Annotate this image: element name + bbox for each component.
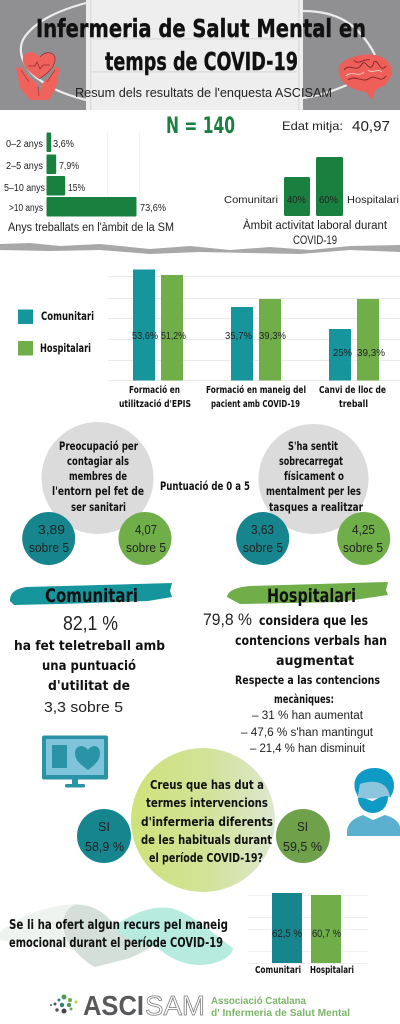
heading: hospitalari: Hospitalari [267,585,356,607]
panel: hospitalari: – 21,4 % han disminuit [250,743,366,755]
panel: contagion worry: 4,07 [135,523,157,537]
bar chart: years worked: 7,9% [59,161,79,172]
logo: ASCISAM: SAM [145,990,205,1021]
panel: overload: tasques a realitzar [269,500,363,514]
bar chart: emotional support [248,893,368,976]
panel: comunitari: ha fet teletreball amb [14,639,165,654]
panel: overload: físicament o [284,469,344,483]
bar chart: training and job change: 39,3% [357,347,385,359]
panel: contagion worry: ser sanitari [71,500,126,514]
title: temps de COVID-19 [105,47,298,76]
bar chart: training and job change: 51,2% [161,330,186,342]
callout: hospitalari yes: 59,5 % [283,839,322,854]
bar chart: years worked: 3,6% [53,139,74,150]
bar chart: training and job change: 39,3% [259,330,286,342]
icon: nurse with mask [347,768,400,836]
legend: Comunitari [41,309,94,323]
face mask [86,0,303,110]
panel: contagion worry: sobre 5 [126,541,166,555]
bar chart: emotional support: Hospitalari [310,965,354,976]
bar chart: work setting: COVID-19 [293,235,337,247]
callout: hospitalari yes: SI [297,819,308,834]
callout: hospitalari yes [276,809,330,863]
bar chart: training and job change: 25% [333,347,352,359]
bar chart: work setting [224,157,399,247]
panel: comunitari: d'utilitat de [48,679,130,694]
icon: logo dots [50,994,78,1014]
bar chart: training and job change: utilització d'EPIS [119,399,191,410]
panel: hospitalari: 79,8 % [203,610,252,629]
callout: comunitari yes [77,809,131,863]
panel: overload: 4,25 [352,523,375,537]
icon: brain [339,54,392,100]
panel: overload: 3,63 [251,523,274,537]
bar chart: emotional support: Comunitari [255,965,301,976]
score scale note: Puntuació de 0 a 5 [160,479,250,493]
bar chart: years worked: 5–10 anys [4,183,45,194]
title [36,14,366,76]
mean age: Edat mitja: [282,119,343,133]
bar chart: work setting: 60% [319,194,338,206]
bar chart: years worked: Anys treballats en l'àmbit de la SM [8,222,174,234]
logo: ASCISAM: Associació Catalana [211,995,306,1007]
header banner [0,0,400,110]
panel: different interventions question: d'infermeria diferents [141,814,273,829]
panel: emotional support question [0,904,233,967]
logo: ASCISAM: d' Infermeria de Salut Mental [211,1007,350,1019]
bar chart: emotional support: 62,5 % [272,928,302,940]
panel: overload: mentalment per les [266,484,361,498]
panel: different interventions question: Creus que has dut a [150,777,264,792]
callout: comunitari yes: SI [98,819,110,834]
panel: different interventions question: termes intervencions [146,795,268,810]
bar chart: work setting: Àmbit activitat laboral durant [243,219,388,232]
panel: contagion worry: membres de [69,469,127,483]
bar chart: training and job change: Formació en maneig del [206,385,306,396]
panel: comunitari: 3,3 sobre 5 [44,699,123,716]
panel: hospitalari: – 31 % han aumentat [252,710,364,722]
panel: comunitari [10,583,172,788]
panel: hospitalari: considera que les [259,614,368,629]
panel: hospitalari: mecàniques: [274,692,334,706]
bar chart: years worked: >10 anys [9,203,43,214]
panel: overload [236,424,390,565]
panel: emotional support question: emocional durant el període COVID-19 [9,936,223,951]
mask ear loops [21,3,375,100]
panel: different interventions question: de les habituals durant [141,832,272,847]
panel: hospitalari [203,582,400,836]
panel: overload: sobre 5 [243,541,283,555]
icon: monitor with heart [42,736,108,788]
mean age: 40,97 [352,118,390,135]
heading: hospitalari [227,582,388,607]
bar chart: training and job change: Formació en [129,385,180,396]
panel: different interventions question [77,748,330,892]
logo: ASCISAM [50,990,350,1021]
bar chart: work setting: 40% [287,194,306,206]
panel: different interventions question: el període COVID-19? [149,850,263,865]
sample size: N = 140 [166,114,235,139]
panel: overload: sobrecarregat [279,454,343,468]
logo: ASCISAM: ASCI [83,990,144,1021]
heading: comunitari: Comunitari [45,585,138,607]
bar chart: years worked: 73,6% [140,203,166,214]
bar chart: training and job change: 35,7% [225,330,252,342]
bar chart: training and job change: pacient amb COVID-19 [211,399,300,410]
bar chart: years worked: 0–2 anys [6,139,43,150]
panel: hospitalari: – 47,6 % s'han mantingut [241,727,374,739]
legend: Hospitalari [40,341,91,355]
bar chart: years worked: 2–5 anys [6,161,43,172]
callout: comunitari yes: 58,9 % [85,839,124,854]
panel: contagion worry: Preocupació per [59,439,138,453]
bar chart: training and job change [108,270,400,410]
panel: comunitari: 82,1 % [63,613,118,635]
bar chart: training and job change: treball [339,399,368,410]
panel: contagion worry: contagiar als [67,454,129,468]
heading: comunitari [10,583,172,607]
panel: contagion worry: 3,89 [38,523,65,537]
panel: overload: sobre 5 [343,541,383,555]
bar chart: work setting: Hospitalari [347,194,399,206]
bar chart: training and job change: 53,6% [132,330,158,342]
panel: contagion worry: l'entorn pel fet de [52,484,144,498]
legend [18,309,94,356]
panel: contagion worry: sobre 5 [29,541,69,555]
panel: emotional support question: Se li ha ofert algun recurs pel maneig [9,918,228,933]
panel: overload: S'ha sentit [288,439,338,453]
panel: contagion worry [22,422,172,565]
panel: hospitalari: augmentat [276,654,354,669]
bar chart: emotional support: 60,7 % [312,928,341,940]
panel: comunitari: una puntuació [42,659,136,674]
icon: heart in hands [16,52,60,100]
bar chart: years worked: 15% [68,183,85,194]
mean age [282,118,390,135]
bar chart: work setting: Comunitari [224,194,278,206]
subtitle: Resum dels resultats de l'enquesta ASCISAM [75,85,332,100]
bar chart: years worked [4,132,174,234]
